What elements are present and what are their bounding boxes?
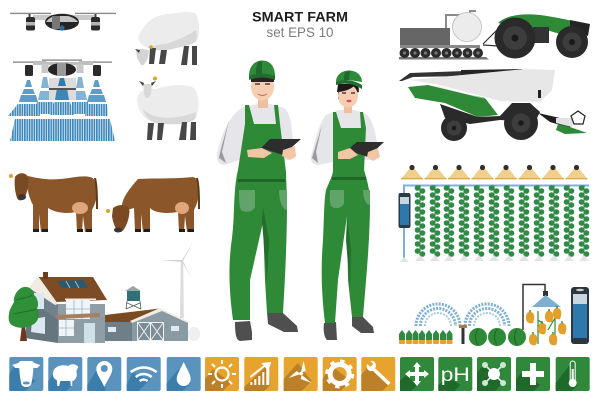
icon: standing cow (9, 173, 98, 232)
icon: water tower (125, 286, 141, 309)
tile: cow (9, 357, 43, 391)
tile: map pin (87, 357, 121, 391)
spray: bottom band (10, 119, 115, 141)
pockets (330, 190, 344, 208)
title: SMART FARM (252, 8, 348, 24)
tile: wrench (361, 357, 395, 391)
grow lamps (401, 165, 588, 179)
tank trailer (399, 11, 489, 60)
icon: large water tank (571, 287, 589, 344)
title: set EPS 10 (266, 24, 334, 40)
neck (344, 103, 352, 113)
icon: drone (10, 13, 116, 31)
tile: network (477, 357, 511, 391)
hair (338, 85, 359, 99)
person: male farmer (217, 60, 301, 341)
tablet (347, 142, 384, 157)
icon: shower and pepper plants (523, 284, 566, 345)
shirt and arms (311, 110, 378, 170)
carrots (399, 330, 452, 344)
spray: cones (8, 77, 108, 116)
tile: water drop (167, 357, 201, 391)
icon: tree (9, 287, 39, 341)
plant vines (415, 185, 589, 261)
tractor body (498, 14, 588, 34)
hands (247, 148, 272, 158)
tablet (261, 139, 301, 155)
icon: sprinkler (399, 304, 526, 346)
person: female farmer (311, 70, 384, 340)
icon: spraying drone (8, 60, 115, 141)
tile: pH (438, 357, 472, 391)
icon row (9, 357, 590, 391)
title (252, 8, 348, 40)
tile: pH: pH (441, 365, 470, 386)
overalls (229, 105, 287, 320)
icon: farm house (25, 272, 107, 343)
shoes (235, 321, 252, 341)
overalls (322, 112, 370, 323)
tile: sheep (48, 357, 82, 391)
hands (338, 148, 358, 159)
tile: turbine (284, 357, 318, 391)
icon: vertical farm irrigation (398, 165, 589, 262)
tile: growth chart (244, 357, 278, 391)
tile: thermometer (556, 357, 590, 391)
tile: move arrows (400, 357, 434, 391)
face (338, 84, 358, 108)
icon: autonomous tractor with tank (399, 11, 590, 60)
icon: grazing cow (106, 177, 200, 232)
tile: plus (516, 357, 550, 391)
cap (336, 70, 362, 82)
shirt and arms (217, 104, 296, 170)
header (538, 113, 572, 128)
water tank (398, 193, 410, 228)
tile: wifi (127, 357, 161, 391)
tile: sun (205, 357, 239, 391)
icon: standing sheep (137, 76, 198, 140)
cabbages (469, 328, 526, 346)
icon: wind turbine (160, 242, 193, 318)
face (251, 74, 274, 100)
cap (249, 60, 275, 76)
icon: barn (105, 308, 200, 341)
neck (258, 96, 268, 108)
tile: gear (323, 357, 357, 391)
icon: combine harvester (399, 69, 587, 141)
shoes (324, 322, 337, 340)
icon: grazing sheep (135, 12, 199, 65)
pockets (239, 190, 255, 212)
